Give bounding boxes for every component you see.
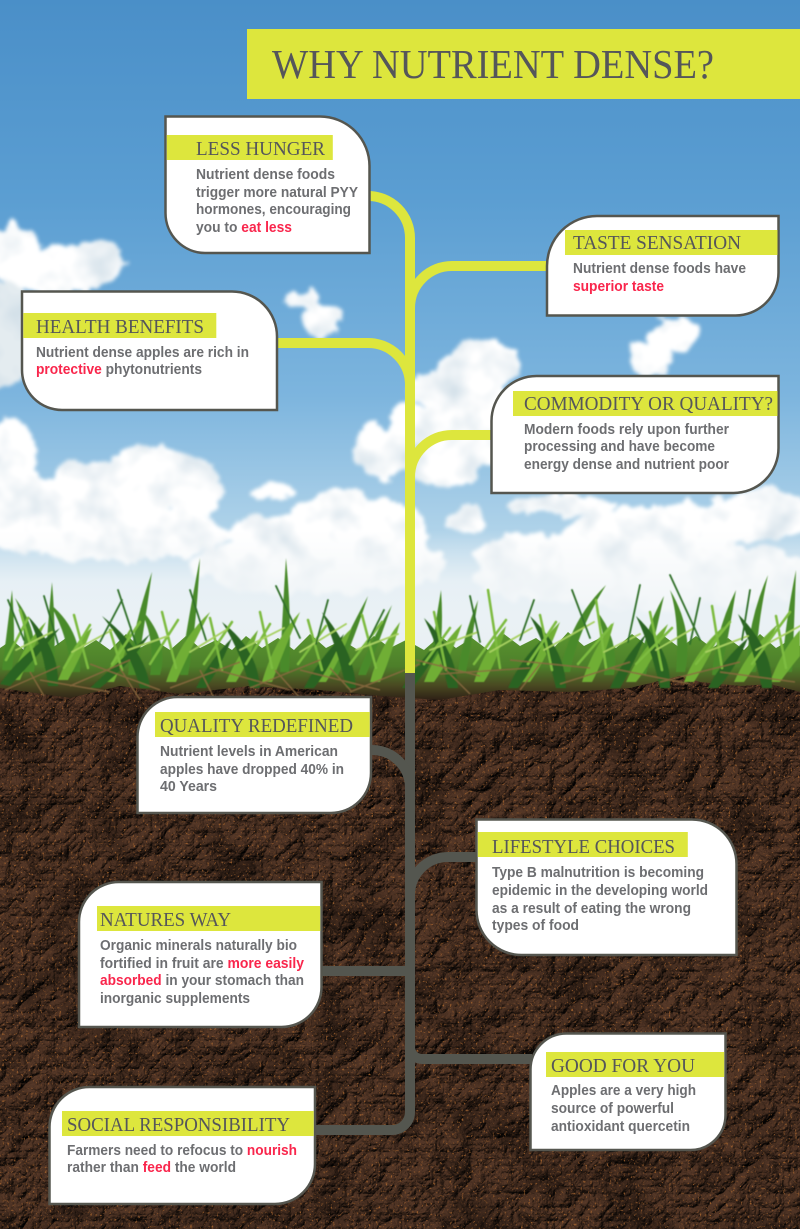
panel: social responsibility: rather than feed the world [67,1160,236,1176]
panel: taste sensation [547,216,779,316]
panel: commodity or quality: processing and have become [524,439,715,455]
panel: natures way: fortified in fruit are more easily [100,956,304,972]
branch: commodity or quality [410,435,493,477]
panel: quality redefined: QUALITY REDEFINED [160,715,353,737]
panel: social responsibility [50,1087,315,1204]
panel: natures way [79,882,322,1027]
panel: lifestyle choices: as a result of eating the wrong [492,901,691,917]
panel: natures way: inorganic supplements [100,991,250,1007]
horizon haze [0,530,800,660]
panel: taste sensation: TASTE SENSATION [573,232,741,254]
stem below ground [405,673,415,1112]
panel: quality redefined: apples have dropped 40% in [160,762,344,778]
panel: less hunger: you to eat less [196,220,292,236]
panel: social responsibility: SOCIAL RESPONSIBILITY [67,1114,290,1136]
panel: commodity or quality: COMMODITY OR QUALITY? [524,393,773,415]
panel: good for you: source of powerful [551,1101,674,1117]
panel: lifestyle choices: epidemic in the developing world [492,883,708,899]
panel: taste sensation: Nutrient dense foods have [573,261,746,277]
panel: less hunger: LESS HUNGER [196,138,325,160]
branch: taste sensation [410,266,549,340]
panel: quality redefined [138,697,371,813]
title: WHY NUTRIENT DENSE? [272,41,714,87]
grass blades [0,558,800,700]
panel: lifestyle choices [476,820,736,955]
branch: less hunger [368,196,410,300]
branch: health benefits [275,343,410,385]
panel: good for you: Apples are a very high [551,1083,696,1099]
dry roots [5,660,795,700]
panel: commodity or quality [492,376,778,493]
panel: health benefits: HEALTH BENEFITS [36,316,204,338]
panel: health benefits [22,292,277,410]
panel: quality redefined: 40 Years [160,779,217,795]
title [247,29,800,99]
panel: quality redefined: Nutrient levels in American [160,744,338,760]
clouds [0,224,800,609]
panel: lifestyle choices: types of food [492,918,579,934]
branch: good for you [410,1047,532,1059]
branch: lifestyle choices [410,857,478,895]
panel: good for you [530,1034,726,1150]
panel: less hunger: Nutrient dense foods [196,167,335,183]
panel: lifestyle choices: LIFESTYLE CHOICES [492,836,675,858]
grass turf [0,632,800,700]
panel: less hunger [166,116,370,253]
panel: health benefits: Nutrient dense apples are rich in [36,345,249,361]
panel: commodity or quality: Modern foods rely upon further [524,422,729,438]
sky background [0,0,800,660]
panel: natures way: NATURES WAY [100,909,231,931]
panel: less hunger: trigger more natural PYY [196,185,358,201]
branch: natures way [320,966,410,976]
panel: less hunger: hormones, encouraging [196,202,351,218]
branch: quality redefined [369,750,410,788]
panel: taste sensation: superior taste [573,279,664,295]
panel: lifestyle choices: Type B malnutrition is becoming [492,865,704,881]
branch: social responsibility [313,1112,410,1130]
panel: good for you: GOOD FOR YOU [551,1055,695,1077]
panel: good for you: antioxidant quercetin [551,1119,690,1135]
panel: health benefits: protective phytonutrients [36,362,202,378]
tree: stem and branches [275,196,549,1130]
soil [0,672,800,1229]
panel: natures way: absorbed in your stomach than [100,973,304,989]
panel: social responsibility: Farmers need to refocus to nourish [67,1143,297,1159]
panel: natures way: Organic minerals naturally bio [100,938,297,954]
stem above ground [405,240,415,673]
panel: commodity or quality: energy dense and nutrient poor [524,457,729,473]
